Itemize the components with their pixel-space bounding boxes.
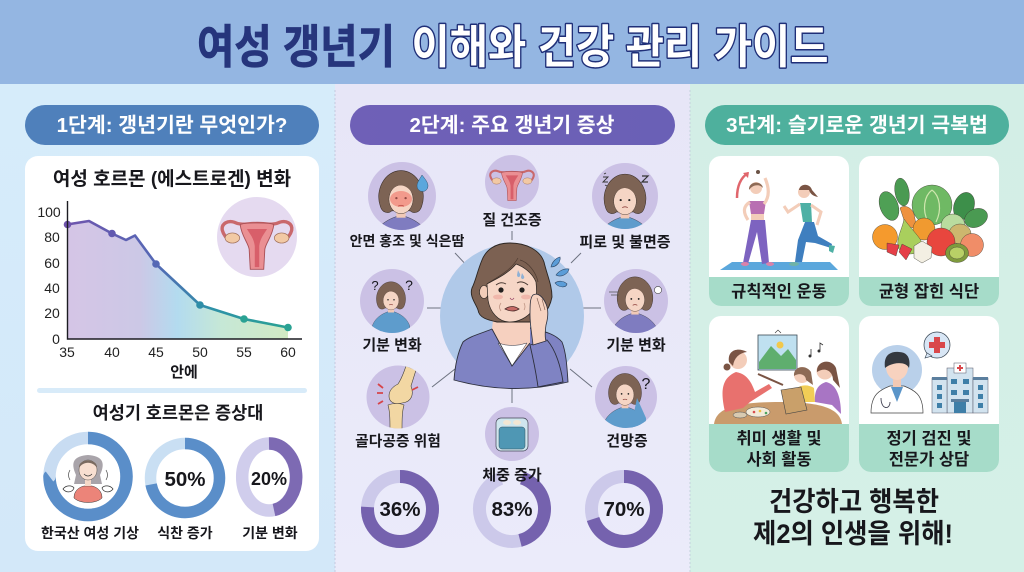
symptom: mood change left: 기분 변화 <box>362 337 422 354</box>
card: balanced diet: 균형 잡힌 식단 <box>879 282 979 301</box>
symptom: osteoporosis risk: 골다공증 위험 <box>355 433 441 450</box>
donut: 36%: 36% <box>379 498 421 521</box>
closing message: 건강하고 행복한 <box>769 487 939 517</box>
title banner <box>0 0 1024 84</box>
donut: 36% <box>368 476 432 542</box>
card: hobbies and social activity <box>709 316 849 472</box>
closing message <box>753 487 953 549</box>
line chart: estrogen decline: 35 <box>59 344 75 360</box>
card: regular check-up: 정기 검진 및 <box>886 429 972 448</box>
card: regular check-up: 전문가 상담 <box>889 450 969 469</box>
line chart: estrogen decline: 0 <box>52 331 60 347</box>
line chart: estrogen decline: 80 <box>44 229 60 245</box>
line chart: estrogen decline: 20 <box>44 305 60 321</box>
panel: step 3 <box>705 105 1009 549</box>
symptom: mood change left: ? <box>405 277 413 293</box>
donut: Korean women <box>50 438 126 515</box>
line chart: estrogen decline: 60 <box>280 344 296 360</box>
card: regular exercise <box>709 156 849 306</box>
donut: 83% <box>471 468 553 550</box>
heading: step 2 <box>350 105 675 145</box>
line chart: estrogen decline: 40 <box>104 344 120 360</box>
symptom: mood change left <box>360 269 424 354</box>
line chart: estrogen decline: 45 <box>148 344 164 360</box>
symptom: hot flush: 안면 홍조 및 식은땀 <box>350 233 464 249</box>
sweater body <box>454 328 568 389</box>
donut: 20% <box>242 443 296 510</box>
icon: two women exercising <box>720 170 838 270</box>
donut: 70% <box>592 476 656 542</box>
face <box>487 264 537 322</box>
subheading: symptoms: 여성기 호르몬은 증상대 <box>93 403 263 423</box>
label: weight gain: 체중 증가 <box>482 467 542 484</box>
central figure: woman with symptoms <box>440 243 584 389</box>
card: regular check-up <box>859 316 999 472</box>
heading: step 2: 2단계: 주요 갱년기 증상 <box>409 114 615 137</box>
donut labels: 한국산 여성 기상 <box>41 525 139 541</box>
closing message: 제2의 인생을 위해! <box>753 519 953 549</box>
donut labels: 기분 변화 <box>242 525 298 541</box>
panel: step 2 <box>350 105 675 550</box>
connector lines <box>427 231 601 403</box>
symptom: fatigue and insomnia <box>580 163 670 249</box>
symptom: mood change left: ? <box>371 278 379 293</box>
symptom: memory loss <box>595 366 657 450</box>
heading: step 1 <box>25 105 319 145</box>
panel: step 1 <box>25 105 319 551</box>
line chart: estrogen decline <box>37 201 302 381</box>
symptom: memory loss: ? <box>642 376 651 393</box>
symptom: mood change right: 기분 변화 <box>606 337 666 354</box>
heading: step 3: 3단계: 슬기로운 갱년기 극복법 <box>726 114 988 137</box>
neck and collar <box>492 312 530 366</box>
card: regular exercise: 규칙적인 운동 <box>731 282 827 301</box>
icon: doctor and hospital <box>871 332 988 413</box>
icon: painting group <box>714 330 842 424</box>
line chart: estrogen decline: 50 <box>192 344 208 360</box>
title banner: 이해와 건강 관리 가이드 <box>412 21 828 73</box>
symptom: mood change right <box>604 269 668 354</box>
icon: uterus <box>217 197 297 277</box>
line chart: estrogen decline: 100 <box>37 204 61 220</box>
hand <box>530 294 548 345</box>
heading: step 1: 1단계: 갱년기란 무엇인가? <box>57 114 287 137</box>
line chart: estrogen decline: 안에 <box>170 364 198 381</box>
sweat drops <box>551 257 569 287</box>
hair <box>471 243 552 322</box>
donut: 20%: 20% <box>251 469 287 489</box>
donut: 50%: 50% <box>164 468 206 491</box>
heading: step 3 <box>705 105 1009 145</box>
symptom: weight gain <box>485 407 539 461</box>
card: hobbies and social activity: 사회 활동 <box>746 450 812 469</box>
card: step 1 <box>25 156 319 551</box>
donut: 50% <box>150 444 220 512</box>
symptom: memory loss: 건망증 <box>606 433 648 450</box>
card: hobbies and social activity: 취미 생활 및 <box>736 429 822 448</box>
donut: 83%: 83% <box>491 498 533 521</box>
sleeve <box>530 340 563 387</box>
symptom: osteoporosis risk <box>355 366 441 450</box>
symptom: vaginal dryness <box>482 155 542 229</box>
donut: 70%: 70% <box>603 498 645 521</box>
line chart: estrogen decline: 40 <box>44 280 60 296</box>
line chart: estrogen decline: 60 <box>44 255 60 271</box>
symptom: vaginal dryness: 질 건조증 <box>482 212 542 229</box>
symptom: hot flush <box>350 162 464 248</box>
line chart: estrogen decline: 55 <box>236 344 252 360</box>
icon: vegetables and fruit <box>872 177 991 263</box>
donut labels: 식찬 증가 <box>157 525 213 541</box>
chart title: 여성 호르몬 (에스트로겐) 변화 <box>53 168 291 190</box>
symptom: fatigue and insomnia: 피로 및 불면증 <box>579 234 671 251</box>
card: balanced diet <box>859 156 999 306</box>
title banner: 여성 갱년기 <box>197 21 395 73</box>
donut labels <box>41 525 298 541</box>
